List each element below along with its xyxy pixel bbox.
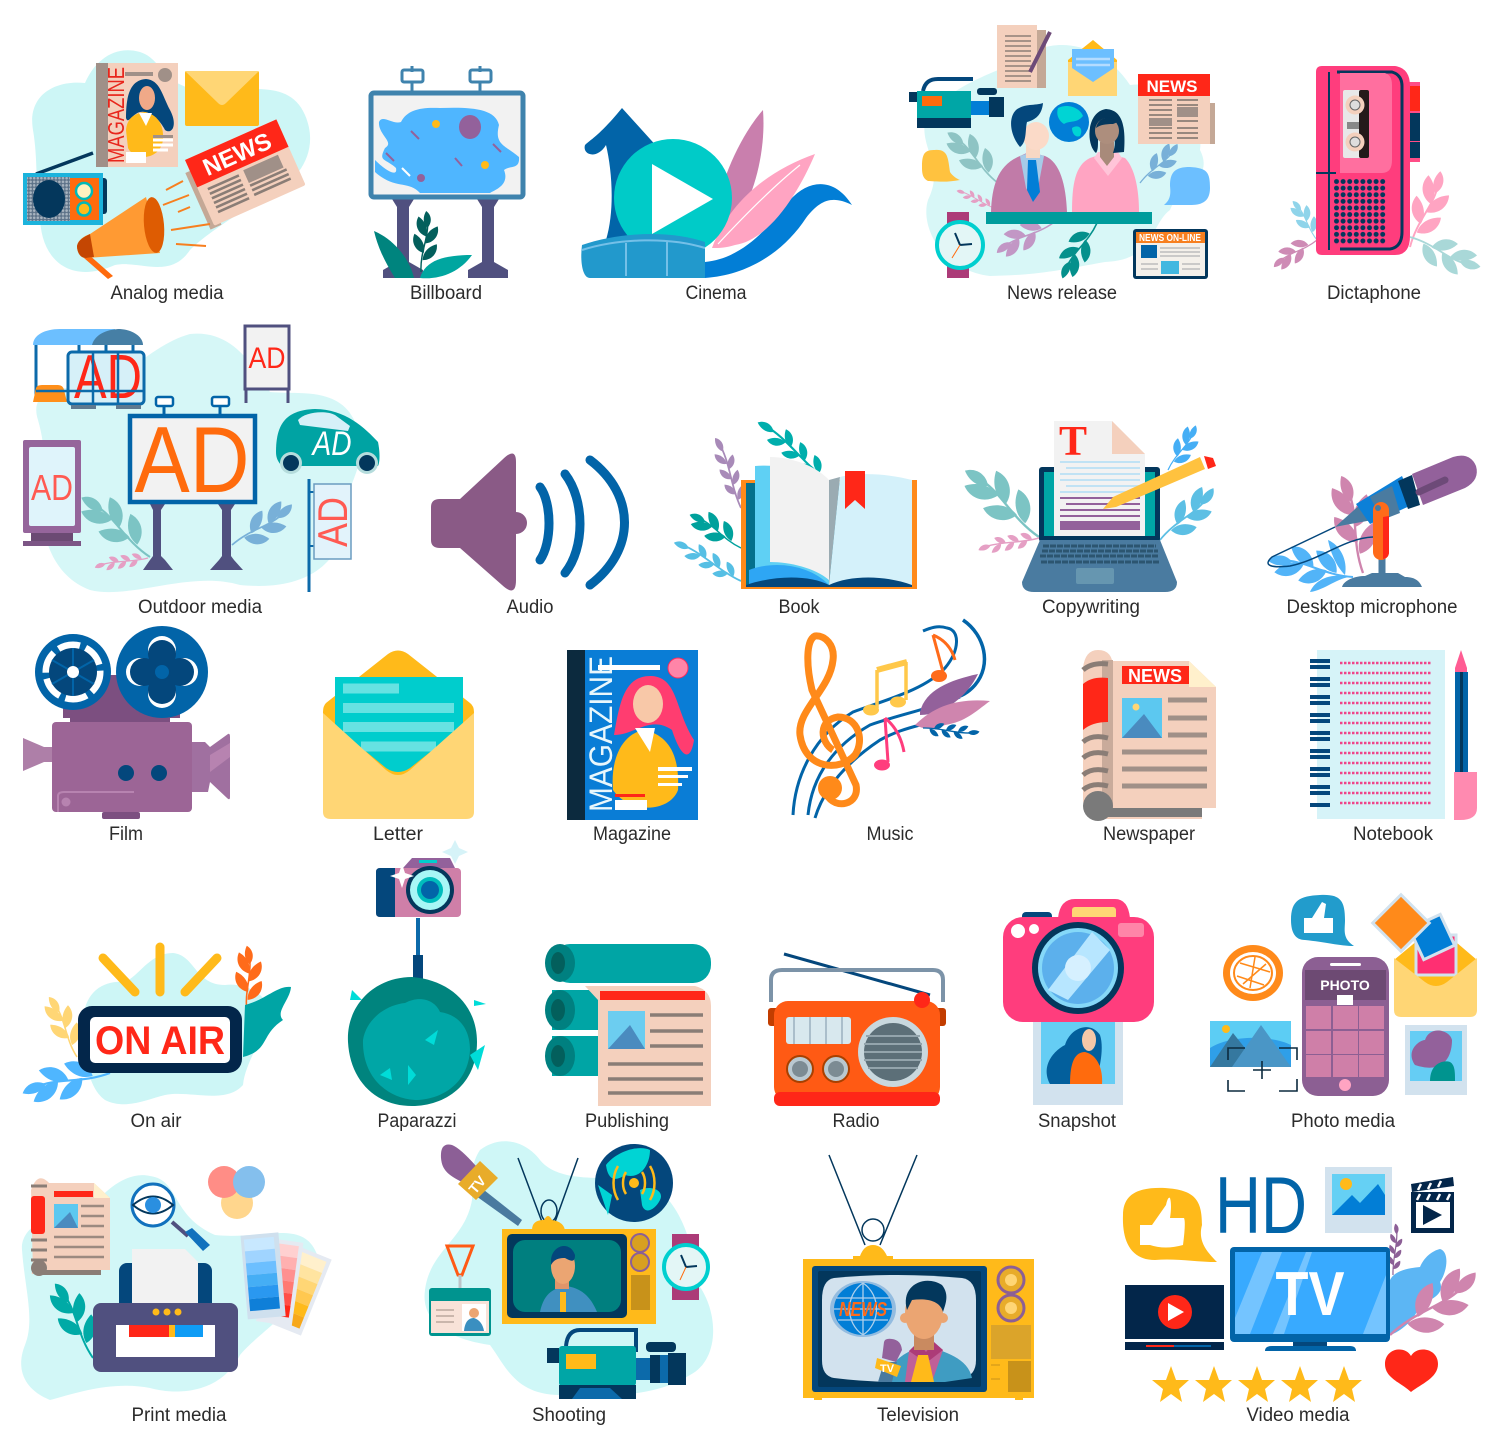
lamps — [402, 66, 491, 100]
label: Cinema — [686, 283, 747, 304]
flag sign: AD — [309, 497, 356, 547]
icon: magazine — [567, 650, 698, 845]
lens — [192, 734, 230, 799]
film strip — [581, 234, 705, 278]
knobs — [787, 1056, 849, 1082]
eyepiece — [23, 738, 52, 771]
id badge — [429, 1246, 491, 1336]
HD: HD — [1215, 1161, 1307, 1251]
AD sign top: AD — [248, 342, 286, 375]
anchor — [885, 1281, 972, 1382]
newspaper — [1138, 74, 1215, 144]
posts — [383, 199, 423, 278]
orange cover — [741, 480, 917, 589]
icon: copywriting — [949, 419, 1230, 618]
headline: NEWS — [1128, 666, 1182, 686]
speaker — [858, 1017, 928, 1087]
background blob — [924, 45, 1204, 276]
bus stop: AD — [74, 343, 142, 412]
arrow — [585, 108, 660, 240]
icon: dictaphone — [1265, 66, 1488, 304]
globe — [595, 1144, 673, 1222]
label: Snapshot — [1038, 1111, 1117, 1132]
notepad — [997, 25, 1050, 88]
page bottom — [746, 578, 912, 587]
label: Copywriting — [1042, 597, 1140, 618]
tablet: NEWS ON-LINE — [1139, 233, 1201, 244]
screen — [822, 1275, 976, 1382]
sign: ON AIR — [95, 1019, 225, 1063]
plant — [38, 1272, 114, 1368]
camera — [1003, 899, 1154, 1022]
label: Television — [877, 1405, 959, 1426]
white page — [770, 457, 829, 580]
icon: cinema — [581, 108, 852, 304]
notes — [863, 635, 955, 770]
knobs — [991, 1267, 1031, 1392]
icon: on air — [17, 945, 291, 1132]
icon: music — [793, 620, 990, 845]
screen frame — [812, 1266, 987, 1392]
magazine: MAGAZINE — [103, 67, 129, 163]
tablet — [1133, 229, 1208, 279]
thumb bubble — [1123, 1188, 1217, 1262]
icon: television — [803, 1155, 1034, 1426]
handheld mic — [441, 1145, 522, 1226]
clef ball — [818, 776, 842, 800]
icon: photo media — [1210, 895, 1477, 1132]
bush — [348, 977, 477, 1106]
tv: TV — [1276, 1260, 1344, 1329]
AD billboard: AD — [134, 407, 250, 512]
label: Desktop microphone — [1286, 597, 1458, 618]
envelope — [185, 71, 259, 126]
label: Film — [109, 824, 143, 845]
newspaper: NEWS — [1146, 77, 1198, 96]
aperture — [1223, 945, 1283, 1001]
plants — [669, 409, 837, 592]
plants — [67, 476, 305, 575]
cabinet — [803, 1259, 1034, 1400]
icon: shooting — [425, 1141, 713, 1426]
rolls — [545, 944, 711, 1076]
sign — [78, 1006, 242, 1073]
microphone — [1335, 456, 1477, 527]
play circle — [614, 139, 732, 257]
icon: snapshot — [1003, 899, 1154, 1132]
flag sign — [309, 479, 356, 592]
right page — [829, 474, 912, 585]
antenna — [829, 1155, 917, 1245]
foot — [102, 812, 140, 819]
antenna — [518, 1158, 578, 1222]
body — [52, 722, 192, 812]
magazine — [96, 63, 178, 167]
video camera — [547, 1330, 686, 1399]
icon: publishing — [545, 944, 711, 1132]
letter — [1068, 40, 1117, 96]
play triangle — [652, 164, 713, 234]
newspaper — [180, 119, 306, 230]
photo — [1033, 1012, 1123, 1105]
photo — [1122, 698, 1162, 738]
globe news — [830, 1281, 896, 1337]
leaves — [350, 990, 486, 1085]
label: Paparazzi — [378, 1111, 456, 1132]
globe news: NEWS — [839, 1299, 888, 1321]
watch — [664, 1234, 708, 1300]
staff lines — [793, 620, 984, 818]
side buttons — [1405, 82, 1420, 162]
AD poster: AD — [31, 467, 73, 508]
plants — [1265, 163, 1488, 290]
background blob — [21, 1175, 318, 1400]
text lines — [1122, 700, 1207, 786]
mic: TV — [880, 1363, 895, 1375]
label: Magazine — [593, 824, 671, 845]
speech bubbles — [922, 150, 1210, 205]
radio — [23, 153, 107, 225]
top — [63, 695, 180, 722]
fold — [829, 477, 840, 585]
roll — [1083, 791, 1202, 821]
dial — [786, 1017, 851, 1044]
plants — [1374, 1223, 1495, 1360]
document — [1054, 419, 1145, 536]
leaves — [915, 674, 990, 743]
decor — [598, 658, 692, 810]
icon: outdoor media — [23, 326, 380, 618]
woman — [613, 676, 694, 808]
label: Book — [778, 597, 820, 618]
blue pages — [755, 466, 829, 585]
mic — [875, 1339, 902, 1382]
bookmark — [845, 471, 865, 509]
body — [768, 1008, 946, 1026]
film ribbon — [705, 184, 852, 278]
pole — [413, 918, 423, 985]
legs — [143, 504, 243, 570]
blue splash — [375, 108, 519, 193]
icon: billboard — [371, 66, 523, 304]
billboard board — [371, 93, 523, 197]
dots — [386, 115, 501, 182]
envelope front — [323, 713, 474, 819]
icon: desktop microphone — [1263, 456, 1477, 618]
page — [1113, 661, 1216, 808]
watch — [937, 212, 983, 278]
label: On air — [130, 1111, 182, 1132]
bush inner — [363, 999, 470, 1100]
woman — [1072, 109, 1139, 212]
handheld mic: TV — [465, 1172, 489, 1197]
plants — [935, 117, 1190, 287]
newspaper: NEWS — [199, 128, 276, 182]
tv — [1230, 1247, 1390, 1351]
plants — [1263, 470, 1391, 601]
label: Photo media — [1291, 1111, 1395, 1132]
label: Outdoor media — [138, 597, 262, 618]
player — [1125, 1285, 1224, 1350]
bus stop — [33, 329, 144, 412]
camera — [909, 79, 1004, 128]
desk — [986, 212, 1152, 224]
portrait photo — [1405, 1025, 1467, 1095]
thumb bubble — [1291, 895, 1354, 946]
heart — [1385, 1349, 1438, 1392]
post — [1373, 502, 1389, 560]
megaphone — [77, 181, 210, 279]
label: Newspaper — [1103, 824, 1196, 845]
landscape — [1210, 1021, 1297, 1091]
lines — [608, 1015, 703, 1093]
sound waves — [540, 460, 624, 585]
label: Shooting — [532, 1405, 606, 1426]
camera — [376, 840, 468, 917]
swatches — [240, 1232, 332, 1336]
background blob — [425, 1141, 713, 1395]
car: AD — [311, 425, 352, 463]
icon: film camera — [23, 626, 230, 845]
label: Dictaphone — [1327, 283, 1421, 304]
icon: video media — [1123, 1161, 1495, 1426]
newspaper — [31, 1178, 110, 1276]
icon: newspaper — [1083, 650, 1216, 845]
icon: news release — [909, 25, 1215, 304]
rays — [103, 947, 217, 992]
icon: radio — [768, 954, 946, 1132]
picture frame — [1325, 1167, 1392, 1233]
clapper — [1411, 1177, 1454, 1233]
car — [276, 409, 380, 474]
cassette — [1343, 90, 1369, 158]
pen — [1454, 650, 1477, 820]
phone — [1302, 957, 1389, 1096]
icon: audio — [431, 453, 624, 618]
document: T — [1059, 419, 1087, 465]
magnifier — [132, 1184, 210, 1251]
stand — [1342, 555, 1422, 587]
label: Music — [866, 824, 914, 845]
lamps — [156, 397, 229, 416]
icon: paparazzi — [348, 840, 486, 1132]
man — [991, 103, 1067, 212]
AD sign top — [245, 326, 289, 403]
antenna — [784, 954, 930, 995]
label: Letter — [373, 824, 424, 845]
title: MAGAZINE — [583, 656, 619, 812]
printer — [93, 1249, 238, 1372]
icon: letter — [323, 650, 474, 845]
tv — [502, 1216, 656, 1324]
body — [1316, 66, 1410, 255]
label: Billboard — [410, 283, 482, 304]
plants — [949, 419, 1230, 558]
speaker — [1334, 178, 1386, 245]
photo — [608, 1011, 645, 1049]
phone: PHOTO — [1320, 977, 1370, 993]
dotted lines — [1340, 663, 1432, 803]
stars — [1152, 1366, 1362, 1402]
label: Radio — [832, 1111, 880, 1132]
label: Audio — [506, 597, 554, 618]
color circles — [208, 1166, 265, 1219]
icon: print media — [21, 1166, 332, 1426]
dials — [118, 765, 167, 781]
cable — [1268, 527, 1373, 567]
note — [335, 677, 463, 772]
label: Video media — [1246, 1405, 1350, 1426]
red band — [1083, 678, 1108, 730]
spine — [1083, 650, 1113, 808]
label: News release — [1007, 283, 1117, 304]
pencil — [1103, 456, 1216, 509]
AD poster — [23, 440, 81, 546]
treble clef — [800, 636, 860, 804]
plants — [17, 945, 291, 1113]
pink leaves — [712, 110, 763, 240]
paper — [585, 986, 711, 1106]
speaker — [431, 453, 516, 590]
reels — [35, 626, 208, 718]
label: Publishing — [585, 1111, 669, 1132]
icon: book — [669, 409, 917, 618]
crest — [853, 1245, 893, 1259]
envelope with photos — [1373, 895, 1477, 1017]
globe — [1049, 102, 1089, 142]
icon: notebook — [1310, 650, 1477, 845]
label: Analog media — [110, 283, 224, 304]
rings — [1310, 661, 1330, 805]
plant — [374, 209, 472, 278]
icon: analog media — [23, 50, 310, 304]
label: Notebook — [1353, 824, 1433, 845]
laptop — [1022, 467, 1177, 592]
background blob — [32, 50, 310, 272]
label: Print media — [132, 1405, 227, 1426]
handle — [771, 970, 943, 1002]
background blob — [36, 334, 361, 592]
background blob — [83, 953, 268, 1104]
